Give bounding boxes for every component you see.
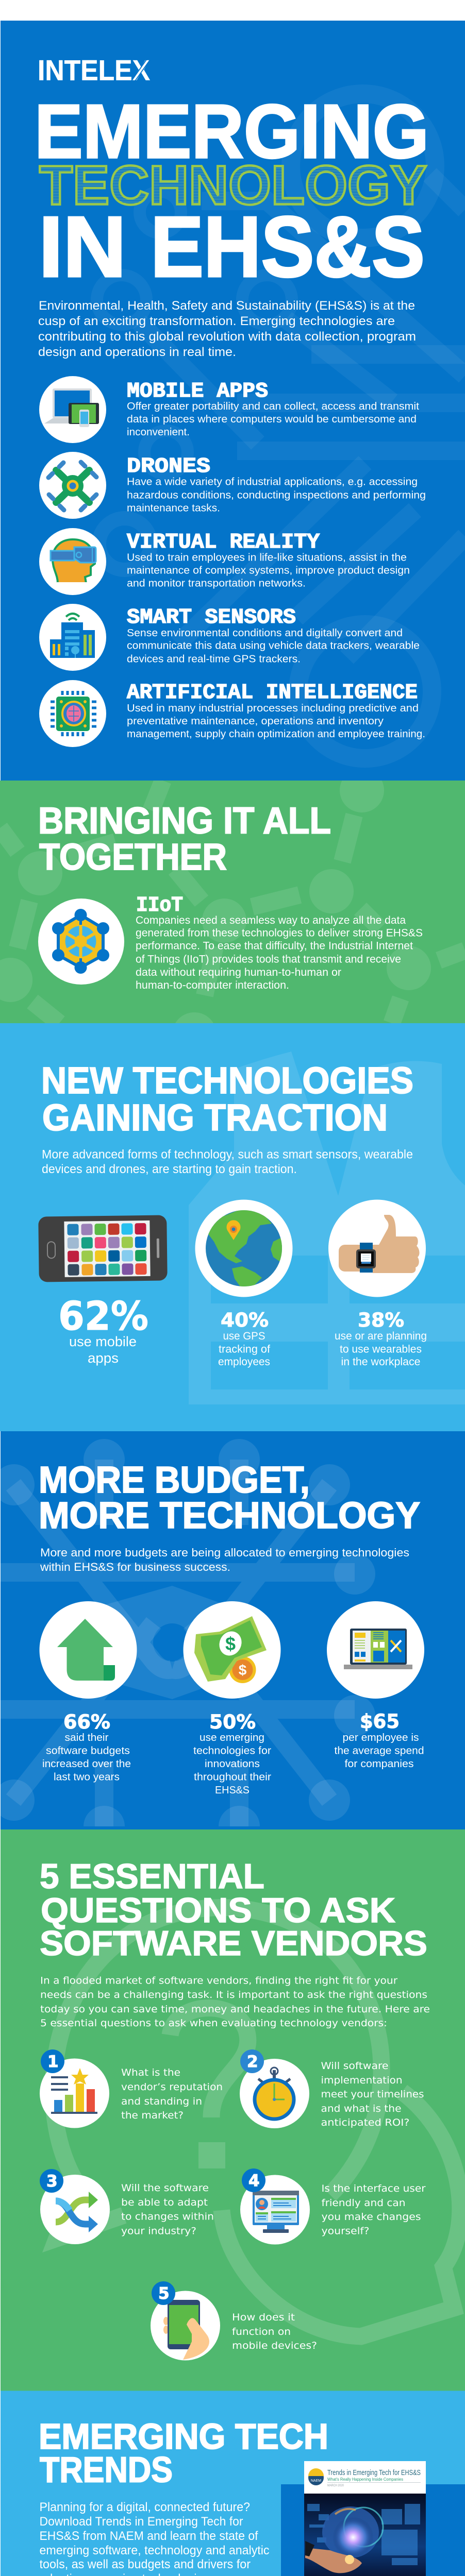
text: IIoT bbox=[136, 894, 423, 991]
stat: 50%: 50% bbox=[209, 1711, 256, 1733]
intro paragraph bbox=[38, 299, 416, 359]
icon: up arrow bbox=[39, 1601, 137, 1699]
heading: BRINGING IT ALL bbox=[38, 801, 331, 842]
badge 1 bbox=[41, 2049, 64, 2073]
intro paragraph: design and operations in real time. bbox=[38, 345, 236, 359]
stat: 50%: EHS&S bbox=[215, 1785, 250, 1796]
icon: AI chip bbox=[39, 680, 106, 747]
stat: 38% wearables bbox=[328, 1199, 427, 1368]
stat: 62% mobile apps: apps bbox=[88, 1350, 119, 1366]
item: virtual reality bbox=[39, 528, 410, 595]
icon: smart building bbox=[39, 604, 106, 671]
question 4: you make changes bbox=[322, 2211, 421, 2223]
stat: 50% bbox=[184, 1601, 280, 1796]
stat: 40% GPS: employees bbox=[218, 1356, 270, 1368]
icon: hand holding phone bbox=[151, 2291, 220, 2361]
item: mobile apps bbox=[39, 376, 419, 443]
icon: thumbs up with watch bbox=[328, 1199, 426, 1297]
stat: 62% mobile apps: 62% bbox=[58, 1294, 148, 1340]
heading: SOFTWARE VENDORS bbox=[40, 1924, 427, 1963]
heading: TRENDS bbox=[40, 2449, 173, 2489]
item: drones bbox=[39, 452, 426, 519]
intro text: 5 essential questions to ask when evaluating technology vendors: bbox=[40, 2018, 387, 2029]
stat: 40% GPS: tracking of bbox=[219, 1344, 270, 1355]
stat: 40% GPS bbox=[195, 1199, 293, 1368]
question 3: Will the software bbox=[121, 2182, 209, 2194]
panel: more budget more technology bbox=[1, 1431, 465, 1829]
icon: drone bbox=[39, 452, 106, 519]
item: mobile apps: data in places where computers would be cumbersome and bbox=[127, 414, 417, 425]
intro text: needs can be a challenging task. It is important to ask the right questions bbox=[40, 1989, 427, 2001]
stat: 40% GPS: use GPS bbox=[223, 1330, 265, 1342]
badge 2: 2 bbox=[247, 2053, 258, 2071]
icon: IIoT network bbox=[38, 899, 124, 985]
report cover: Trends in Emerging Tech for EHS&S bbox=[327, 2468, 421, 2477]
intro text: More and more budgets are being allocated to emerging technologies bbox=[40, 1546, 409, 1559]
text: IIoT: generated from these technologies to deliver strong EHS&S bbox=[136, 927, 423, 939]
badge 5 bbox=[152, 2281, 175, 2305]
icon: phone with apps bbox=[38, 1215, 168, 1282]
icon: stopwatch bbox=[240, 2059, 309, 2128]
body text: Planning for a digital, connected future? bbox=[39, 2500, 250, 2514]
intro text: devices and drones, are starting to gain traction. bbox=[42, 1162, 297, 1176]
question 4 bbox=[240, 2168, 426, 2244]
stat: 66%: last two years bbox=[54, 1771, 120, 1783]
stat: 38% wearables: 38% bbox=[358, 1309, 404, 1331]
icon: VR head bbox=[39, 528, 106, 595]
question 2: Will software bbox=[321, 2060, 389, 2072]
question 3: be able to adapt bbox=[121, 2197, 208, 2208]
stat: 50%: innovations bbox=[205, 1758, 260, 1770]
title bbox=[35, 89, 429, 295]
question 5 bbox=[151, 2281, 317, 2361]
stat: $65: the average spend bbox=[334, 1745, 424, 1757]
item: virtual reality: Used to train employees in life-like situations, assist in the bbox=[127, 552, 407, 564]
body text: tools, as well as budgets and drivers for bbox=[39, 2557, 251, 2571]
panel: 5 essential questions bbox=[1, 1829, 465, 2391]
item: virtual reality: and monitor transportation networks. bbox=[127, 578, 306, 589]
icon: globe with pin bbox=[195, 1199, 293, 1297]
question 4: Is the interface user bbox=[322, 2183, 426, 2194]
question 2: anticipated ROI? bbox=[321, 2117, 409, 2128]
stat: 62% mobile apps: use mobile bbox=[69, 1334, 137, 1349]
item: artificial intelligence: preventative maintenance, operations and inventory bbox=[127, 716, 384, 727]
question 1: What is the bbox=[121, 2067, 180, 2078]
stat: $65: for companies bbox=[344, 1758, 413, 1770]
question 2: implementation bbox=[321, 2075, 402, 2086]
heading: MORE BUDGET, bbox=[39, 1460, 310, 1501]
intro text: within EHS&S for business success. bbox=[40, 1561, 230, 1573]
text: IIoT: data without requiring human-to-human or bbox=[136, 967, 341, 978]
icon: money: $ bbox=[239, 1662, 247, 1678]
badge 2 bbox=[240, 2049, 264, 2073]
stat: 38% wearables: use or are planning bbox=[335, 1330, 427, 1342]
text: IIoT: of Things (IIoT) provides tools that transmit and receive bbox=[136, 953, 401, 965]
item: artificial intelligence: Used in many industrial processes including predictive and bbox=[127, 703, 419, 714]
question 1 bbox=[40, 2049, 223, 2128]
panel: intro section bbox=[1, 21, 465, 781]
item: artificial intelligence bbox=[39, 680, 425, 747]
intro text: More advanced forms of technology, such as smart sensors, wearable bbox=[42, 1148, 413, 1161]
heading bbox=[39, 2416, 328, 2489]
title: EMERGING bbox=[35, 89, 429, 174]
intro text bbox=[40, 1975, 430, 2029]
report backdrop bbox=[281, 2484, 465, 2576]
question 2 bbox=[240, 2049, 424, 2128]
body text: Download Trends in Emerging Tech for bbox=[39, 2515, 243, 2529]
intro text: today so you can save time, money and headaches in the future. Here are bbox=[40, 2004, 430, 2015]
panel: bringing it all together bbox=[0, 768, 465, 1023]
panel: new technologies gaining traction bbox=[0, 1023, 465, 1431]
item: smart sensors: SMART SENSORS bbox=[127, 606, 296, 630]
text: IIoT: performance. To ease that difficulty, the Industrial Internet bbox=[136, 940, 413, 952]
text: IIoT: IIoT bbox=[136, 894, 183, 918]
icon: monitor interface bbox=[240, 2175, 310, 2244]
badge 4: 4 bbox=[248, 2172, 260, 2190]
item: mobile apps: inconvenient. bbox=[127, 427, 190, 438]
logo: Intelex: INTELEX bbox=[38, 54, 150, 87]
badge 3: 3 bbox=[46, 2172, 58, 2191]
stat: 66%: software budgets bbox=[46, 1745, 130, 1757]
item: drones: DRONES bbox=[127, 455, 210, 479]
item: artificial intelligence: management, supply chain optimization and employee training. bbox=[127, 728, 425, 740]
intro text: In a flooded market of software vendors, finding the right fit for your bbox=[40, 1975, 397, 1987]
question 1: and standing in bbox=[121, 2096, 202, 2107]
question 4: yourself? bbox=[322, 2226, 369, 2237]
icon: shuffle arrows bbox=[40, 2175, 110, 2244]
question 5: mobile devices? bbox=[232, 2340, 317, 2351]
icon: laptop tools bbox=[327, 1601, 424, 1699]
title: EHS&S bbox=[151, 199, 425, 295]
item: mobile apps: Offer greater portability and can collect, access and transmit bbox=[127, 401, 419, 412]
stat: 66%: said their bbox=[65, 1732, 109, 1743]
stat: 50%: technologies for bbox=[193, 1745, 271, 1757]
item: virtual reality: VIRTUAL REALITY bbox=[127, 531, 320, 554]
stat: $65: per employee is bbox=[342, 1732, 419, 1743]
item: artificial intelligence: ARTIFICIAL INTELLIGENCE bbox=[127, 681, 418, 705]
text: IIoT: Companies need a seamless way to analyze all the data bbox=[136, 914, 406, 926]
heading bbox=[38, 801, 331, 878]
intro paragraph: contributing to this global revolution with data collection, program bbox=[38, 330, 416, 344]
stat: 50%: use emerging bbox=[200, 1732, 264, 1743]
question 5: function on bbox=[232, 2326, 291, 2337]
question 3: to changes within bbox=[121, 2211, 214, 2223]
item: smart sensors: communicate this data using vehicle data trackers, wearable bbox=[127, 640, 420, 651]
text: IIoT: human-to-computer interaction. bbox=[136, 979, 289, 991]
stat: 66%: 66% bbox=[63, 1711, 110, 1733]
heading: EMERGING TECH bbox=[39, 2416, 328, 2456]
item: smart sensors bbox=[39, 604, 420, 671]
stat: 62% mobile apps bbox=[38, 1215, 168, 1366]
body text: emerging software, technology and analytic bbox=[39, 2544, 269, 2557]
stat: 66%: increased over the bbox=[42, 1758, 131, 1770]
panel: emerging tech trends bbox=[1, 2391, 465, 2576]
item: smart sensors: devices and real-time GPS trackers. bbox=[127, 653, 301, 665]
icon: money bbox=[184, 1601, 280, 1699]
item: mobile apps: MOBILE APPS bbox=[127, 380, 268, 403]
icon: ratings chart bbox=[40, 2059, 109, 2128]
stat: 66% bbox=[39, 1601, 137, 1783]
question 5: How does it bbox=[232, 2312, 295, 2323]
body text bbox=[39, 2500, 269, 2576]
heading bbox=[41, 1060, 413, 1139]
heading: QUESTIONS TO ASK bbox=[41, 1891, 395, 1930]
report cover: MARCH 2020 bbox=[327, 2484, 344, 2487]
item: drones: hazardous conditions, conducting inspections and performing bbox=[127, 489, 426, 501]
item: smart sensors: Sense environmental conditions and digitally convert and bbox=[127, 628, 403, 639]
question 3: your industry? bbox=[121, 2226, 196, 2237]
question 2: and what is the bbox=[321, 2103, 401, 2114]
badge 5: 5 bbox=[158, 2284, 170, 2303]
question 3 bbox=[40, 2169, 214, 2244]
item: drones: maintenance tasks. bbox=[127, 503, 220, 514]
stat: 50%: throughout their bbox=[194, 1771, 271, 1783]
item: drones: Have a wide variety of industrial applications, e.g. accessing bbox=[127, 476, 418, 487]
intro paragraph: cusp of an exciting transformation. Emerging technologies are bbox=[38, 314, 395, 328]
heading: NEW TECHNOLOGIES bbox=[41, 1060, 413, 1101]
title: IN bbox=[39, 199, 126, 295]
stat: 38% wearables: in the workplace bbox=[341, 1356, 421, 1368]
intro paragraph: Environmental, Health, Safety and Sustainability (EHS&S) is at the bbox=[39, 299, 415, 313]
stat: $65: $65 bbox=[360, 1710, 400, 1733]
icon: devices bbox=[39, 376, 106, 443]
heading: GAINING TRACTION bbox=[42, 1097, 388, 1139]
heading: TOGETHER bbox=[39, 837, 227, 878]
item: virtual reality: maintenance of complex systems, improve product design bbox=[127, 565, 410, 576]
question 2: meet your timelines bbox=[321, 2089, 424, 2100]
report cover: NAEM bbox=[311, 2479, 321, 2483]
intro text bbox=[40, 1546, 409, 1573]
body text: EHS&S from NAEM and learn the state of bbox=[39, 2529, 258, 2543]
question 1: vendor’s reputation bbox=[121, 2081, 223, 2093]
title: TECHNOLOGY bbox=[39, 154, 427, 216]
badge 4 bbox=[242, 2168, 265, 2192]
badge 3 bbox=[40, 2169, 63, 2193]
question 1: the market? bbox=[121, 2110, 184, 2121]
icon: money: $ bbox=[225, 1633, 236, 1654]
heading bbox=[40, 1857, 427, 1963]
stat: $65 bbox=[327, 1601, 424, 1770]
stat: 38% wearables: to use wearables bbox=[340, 1344, 422, 1355]
report cover: What's Really Happening Inside Companies bbox=[327, 2477, 403, 2482]
heading: MORE TECHNOLOGY bbox=[39, 1495, 420, 1536]
question 4: friendly and can bbox=[322, 2197, 405, 2209]
heading: 5 ESSENTIAL bbox=[40, 1857, 264, 1896]
badge 1: 1 bbox=[47, 2053, 59, 2071]
heading bbox=[39, 1460, 420, 1536]
report cover bbox=[304, 2461, 426, 2576]
stat: 40% GPS: 40% bbox=[221, 1309, 269, 1331]
intro text bbox=[42, 1148, 413, 1176]
